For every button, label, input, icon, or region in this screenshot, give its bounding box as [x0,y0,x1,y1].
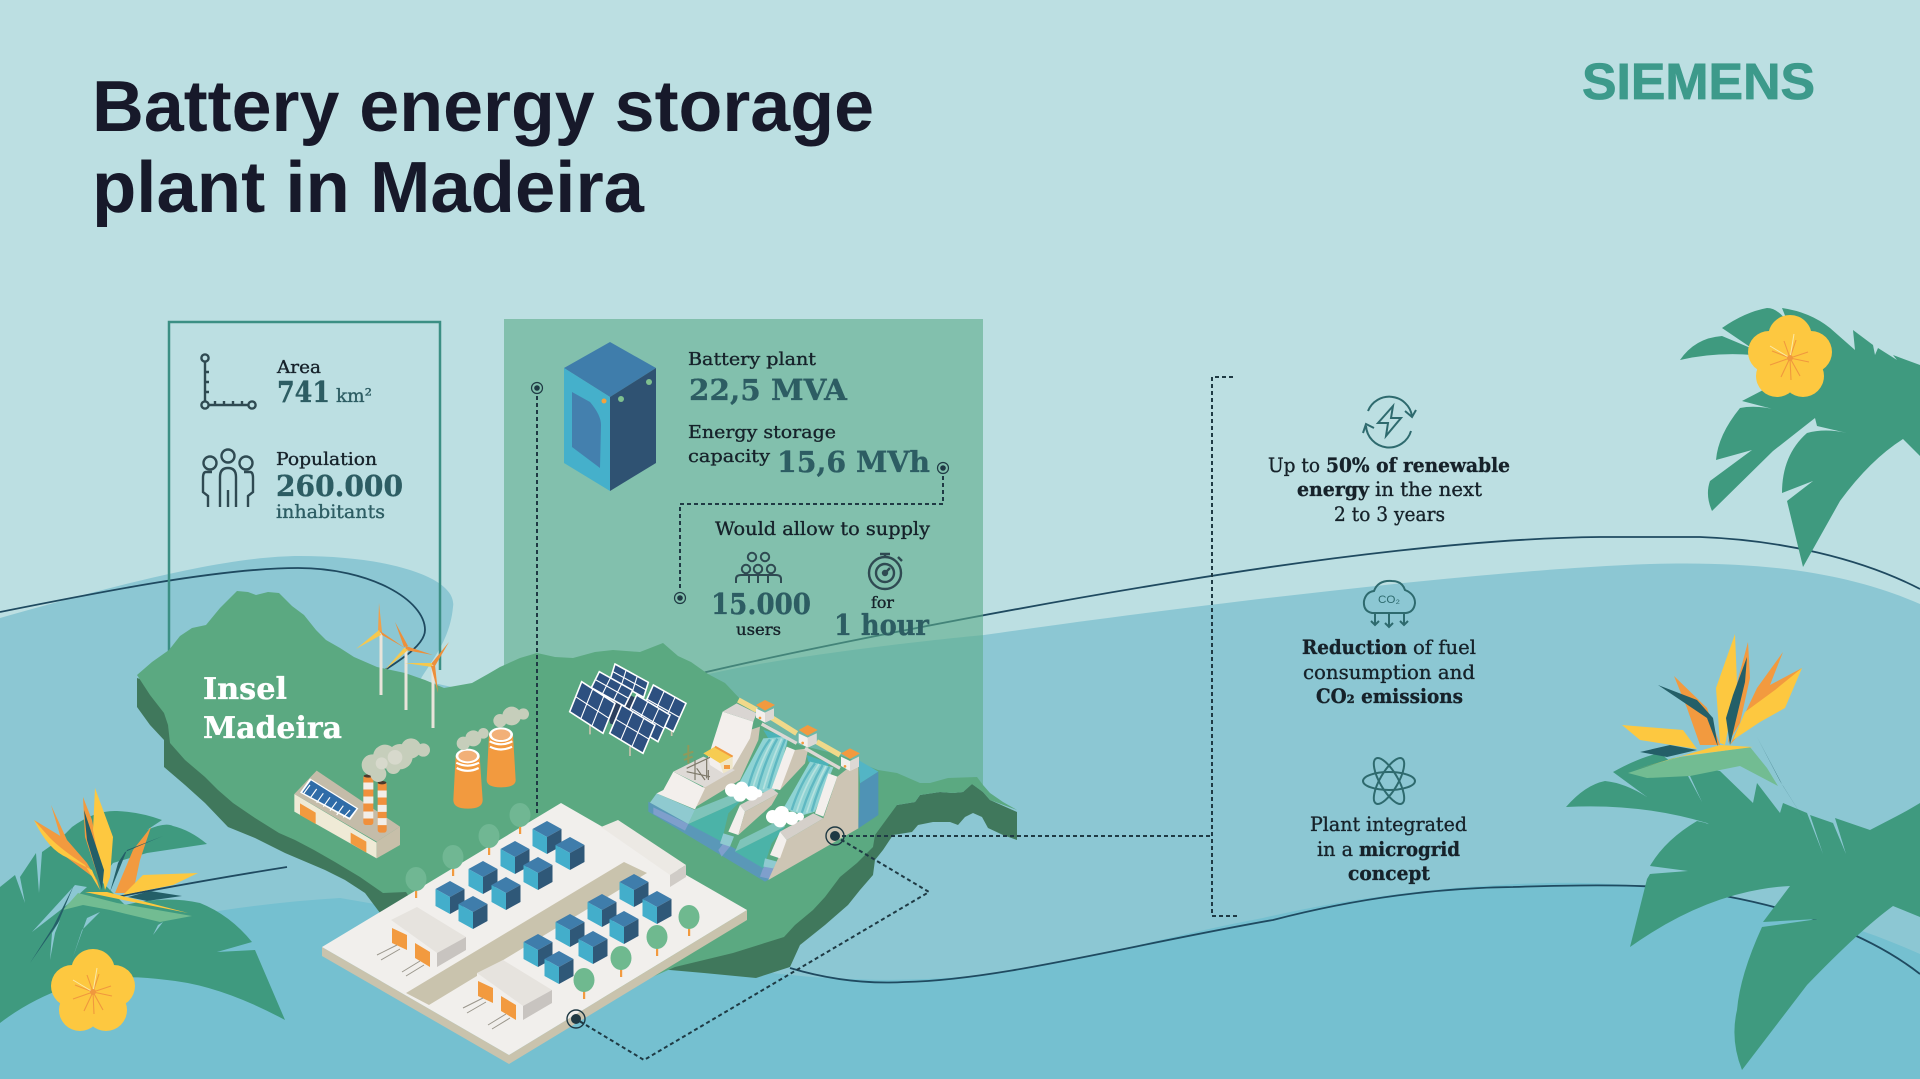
icon: atom [1363,754,1415,808]
storage label: capacity [688,446,771,467]
panel background [504,319,983,791]
upper current line [0,537,1920,690]
bird of paradise flower [30,788,198,963]
icon: CO2 cloud: CO₂ [1378,594,1400,606]
title: plant in Madeira [92,148,645,228]
storage label: Energy storage [688,422,836,443]
island cliff [137,678,1017,978]
solar panels [570,664,686,756]
benefit: renewable energy [1268,397,1510,526]
benefit text: energy [1297,477,1370,501]
panel: battery plant [504,319,983,791]
control buildings [377,907,552,1029]
island label: Madeira [203,711,342,746]
population label: Population [276,449,377,470]
factory [294,771,400,858]
battery plant value: 22,5 MVA [689,373,848,407]
hydro dam [648,700,878,882]
mid water wave [0,556,1920,1079]
battery plant plate [322,803,747,1064]
benefit text: in the next [1375,477,1482,501]
icon: population [203,450,253,507]
benefit text: Reduction [1302,635,1407,659]
plate trees [574,905,700,999]
benefit text: concept [1348,861,1431,885]
area value: 741 [277,375,330,409]
large pin: battery plant [567,1010,585,1028]
island surface [137,591,1017,1000]
island label: Insel [203,672,287,707]
benefit text: of fuel [1413,635,1476,659]
top right foliage [1680,308,1920,567]
title [92,67,874,228]
icon: renewable energy [1363,397,1416,447]
benefit text: CO₂ emissions [1316,684,1463,708]
benefit: emissions [1302,581,1476,708]
benefit text: Plant integrated [1310,812,1467,836]
population value: 260.000 [276,469,403,503]
wind turbines [356,603,449,728]
island trees [406,803,530,898]
icon: battery unit [564,342,656,491]
icon: stopwatch [869,554,902,589]
dotted connectors [537,377,1237,1060]
icon: area axes [201,354,256,409]
benefit text [1268,453,1510,526]
icon: users [736,553,781,583]
hibiscus flower [51,949,135,1031]
panel outline [169,322,440,670]
small pin markers [532,382,948,604]
area value: km² [336,385,372,407]
benefit text: microgrid [1359,837,1460,861]
lower left foliage [0,788,285,1031]
leaf [1566,753,1920,1070]
hour value: 1 hour [834,608,930,642]
battery plant label: Battery plant [688,349,817,370]
siemens logo: SIEMENS [1582,53,1815,110]
island label [203,672,342,746]
cooling tower smoke [457,707,529,750]
hibiscus flower [1748,315,1832,397]
users label: users [736,620,781,639]
area value [277,375,372,409]
lower current line [60,867,1920,982]
leaf [1680,308,1920,567]
benefit text [1302,635,1476,708]
benefit text: 50% of renewable [1326,453,1510,477]
title: Battery energy storage [92,67,874,147]
users value: 15.000 [711,587,811,621]
for label: for [871,593,894,612]
leaf slits [32,885,163,960]
benefit text: 2 to 3 years [1334,502,1445,526]
factory smoke [362,738,430,782]
benefit text: Up to [1268,453,1320,477]
bird of paradise flower [1622,634,1807,824]
storage label [688,422,836,467]
cooling towers [453,727,516,809]
icon: CO2 cloud [1364,581,1415,627]
battery containers [436,821,672,984]
large pin: hydro dam [826,827,844,845]
lower water wave [0,883,1920,1079]
leaf [0,811,285,1023]
area label: Area [276,357,321,378]
benefit: microgrid [1310,754,1467,885]
benefit text: consumption and [1303,660,1475,684]
storage value: 15,6 MVh [777,445,930,479]
benefit text: in a [1317,837,1353,861]
benefit text [1310,812,1467,885]
population unit: inhabitants [276,501,385,523]
supply heading: Would allow to supply [715,518,930,540]
lower right foliage [1566,634,1920,1070]
panel: island facts [169,322,440,670]
